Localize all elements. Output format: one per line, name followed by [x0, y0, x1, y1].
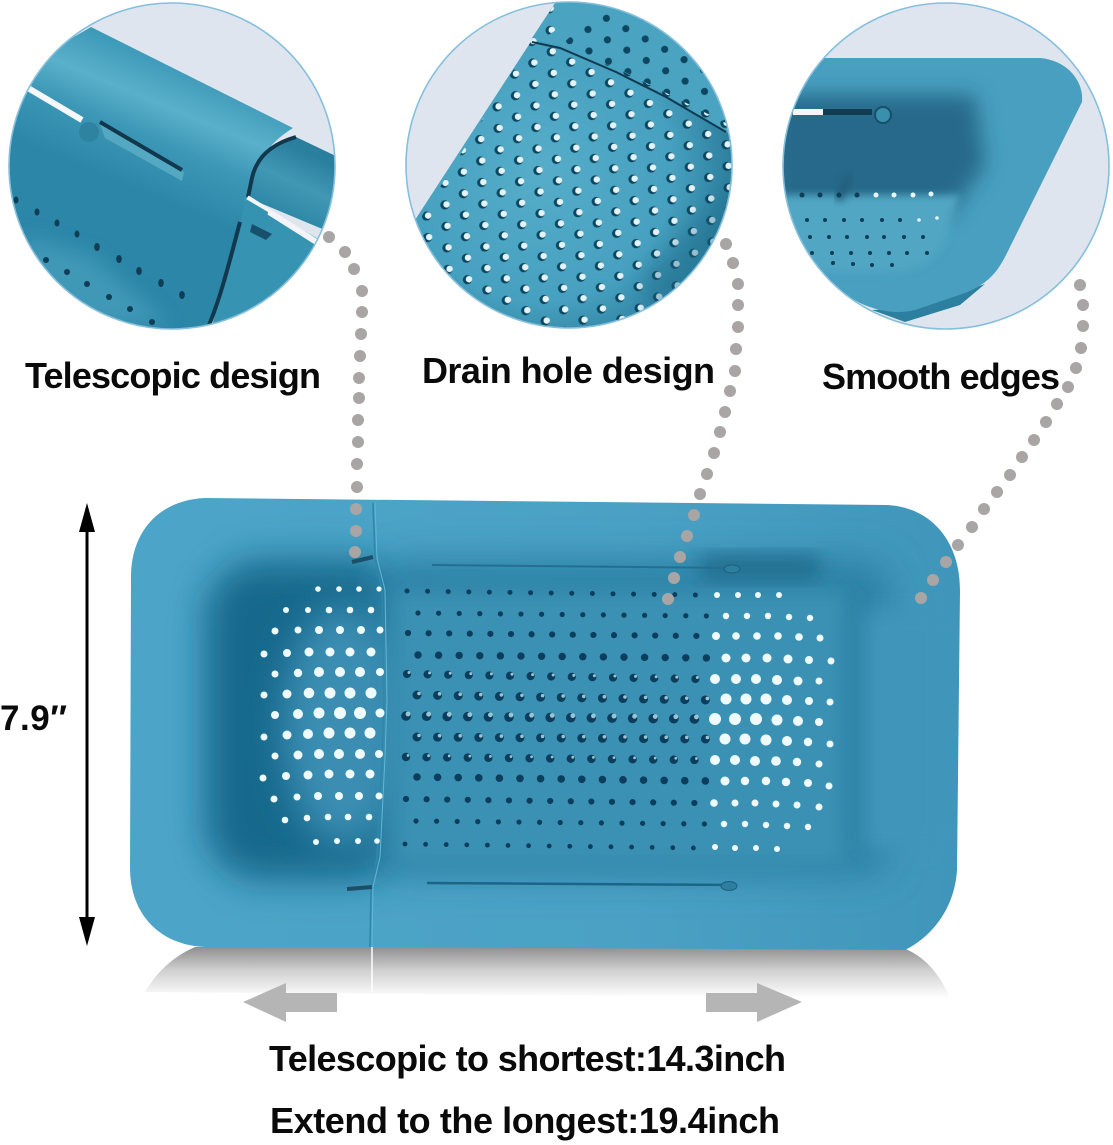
- centre hole light crescents: [408, 672, 709, 758]
- left white drain holes: [260, 586, 384, 845]
- panel: drain hole design close-up: [400, 0, 740, 335]
- arrow: extend right: [706, 983, 802, 1022]
- dotted leader: smooth edges: [915, 279, 1089, 604]
- panel: smooth edges close-up: [770, 0, 1113, 335]
- colander: top view: [130, 498, 960, 950]
- text: shortest length: Telescopic to shortest:14.3inch: [269, 1038, 786, 1079]
- seam reflection: [371, 947, 373, 992]
- arrow: height dimension: [79, 503, 95, 946]
- heading: telescopic design: Telescopic design: [25, 355, 321, 396]
- colander inner well: [205, 560, 405, 880]
- arrow: shrink left: [243, 983, 337, 1022]
- dotted leader: telescopic design: [323, 231, 368, 558]
- heading: drain hole design: Drain hole design: [422, 350, 715, 391]
- label: height: 7.9″: [0, 699, 67, 738]
- shadow: reflection under colander: [145, 947, 950, 998]
- text: longest length: Extend to the longest:19.4inch: [270, 1100, 780, 1141]
- right white drain holes: [709, 592, 834, 852]
- panel: telescopic design close-up: [0, 0, 340, 340]
- centre dark drain holes: [405, 591, 709, 848]
- slots and knobs: [347, 557, 740, 890]
- heading: smooth edges: Smooth edges: [822, 356, 1060, 397]
- dotted leader: drain hole design: [662, 238, 744, 605]
